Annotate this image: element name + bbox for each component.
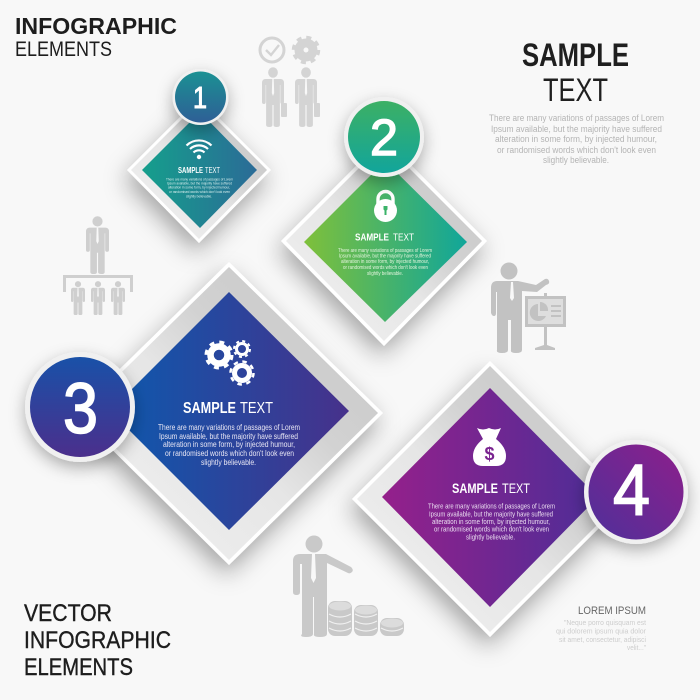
text block: description 2: slightly believable. [367, 271, 403, 277]
text block: intro paragraph [489, 113, 664, 165]
text block: description 3: There are many variations of passages of Lorem [158, 423, 300, 432]
text block: description 4: There are many variations of passages of Lorem [428, 502, 555, 510]
icon: wifi [186, 140, 212, 159]
text block: intro paragraph: There are many variations of passages of Lorem [489, 113, 664, 123]
text block: description 2: alteration in some form, by injected humour, [341, 259, 429, 265]
text block: lorem ipsum quote: "Neque porro quisquam est [564, 618, 647, 627]
heading: sample text [522, 37, 629, 108]
title: vector infographic elements: VECTOR [24, 600, 112, 627]
text block: lorem ipsum quote: sit amet, consectetur, adipisci [559, 635, 646, 644]
badge 1 [172, 69, 228, 125]
text block: intro paragraph: alteration in some form, by injected humour, [495, 134, 657, 144]
heading: sample text 3: SAMPLE [183, 400, 236, 417]
icon: money bag [473, 428, 506, 466]
icon: gears [206, 341, 254, 384]
title: infographic elements: ELEMENTS [15, 38, 112, 61]
heading: sample text 4: SAMPLE [452, 480, 498, 496]
text block: description 2: or randomised words which don't look even [343, 265, 428, 271]
text block: description 1: slightly believable. [186, 194, 212, 198]
text block: description 4: alteration in some form, by injected humour, [432, 517, 550, 526]
heading: sample text 1: SAMPLE [178, 166, 203, 175]
text block: intro paragraph: or randomised words which don't look even [497, 145, 656, 155]
heading: sample text 4: TEXT [502, 480, 530, 496]
text block: description 3: slightly believable. [201, 458, 256, 467]
text block: description 2 [338, 248, 432, 277]
text block: lorem ipsum quote [556, 605, 647, 652]
heading: sample text 2: SAMPLE [355, 232, 389, 244]
panel 2: green diamond [281, 138, 487, 346]
title: infographic elements: INFOGRAPHIC [15, 13, 177, 39]
badge 4: 4 [613, 451, 650, 531]
icon: presenter with board [491, 262, 566, 353]
text block: description 3: Ipsum available, but the majority have suffered [159, 432, 298, 441]
text block: description 3 [158, 423, 300, 467]
heading: sample text: SAMPLE [522, 37, 629, 73]
icon: organisation chart [63, 216, 133, 315]
panel 1: teal diamond [127, 98, 271, 243]
icon: businessmen with clock and gear [260, 38, 320, 127]
title: vector infographic elements [24, 600, 171, 681]
text block: description 1: Ipsum available, but the majority have suffered [167, 180, 232, 186]
badge 2 [344, 97, 424, 177]
icon: businessman with coins [293, 536, 404, 637]
heading: sample text 2: TEXT [393, 232, 414, 244]
icon: money bag: $ [484, 444, 495, 464]
panel 3: blue diamond [75, 262, 383, 565]
badge 2: 2 [370, 109, 398, 166]
text block: intro paragraph: Ipsum available, but the majority have suffered [491, 124, 662, 134]
text block: description 4: Ipsum available, but the majority have suffered [429, 510, 553, 518]
text block: description 3: alteration in some form, by injected humour, [163, 440, 295, 449]
badge 3: 3 [63, 370, 98, 449]
text block: intro paragraph: slightly believable. [543, 155, 609, 165]
panel 4: purple diamond [352, 361, 628, 637]
text block: description 3: or randomised words which don't look even [165, 449, 294, 458]
badge 3 [25, 352, 135, 462]
badge 1: 1 [193, 80, 207, 115]
text block: description 1: There are many variations of passages of Lorem [166, 176, 234, 182]
text block: description 4: slightly believable. [466, 532, 515, 542]
text block: description 2: Ipsum available, but the majority have suffered [339, 254, 431, 260]
heading: sample text 3: TEXT [240, 400, 273, 417]
text block: description 1 [166, 176, 234, 198]
title: vector infographic elements: ELEMENTS [24, 654, 133, 681]
text block: description 1: alteration in some form, by injected humour, [168, 184, 230, 190]
title: vector infographic elements: INFOGRAPHIC [24, 627, 171, 654]
text block: lorem ipsum quote: qui dolorem ipsum quia dolor [556, 626, 646, 636]
heading: sample text: TEXT [543, 72, 608, 108]
text block: lorem ipsum quote: velit..." [627, 643, 646, 652]
title: infographic elements [15, 13, 177, 61]
text block: description 1: or randomised words which don't look even [169, 189, 230, 194]
text block: description 2: There are many variations of passages of Lorem [338, 248, 432, 254]
icon: padlock [374, 192, 397, 222]
heading: sample text 1: TEXT [205, 166, 220, 175]
text block: description 4: or randomised words which don't look even [434, 524, 549, 534]
text block: lorem ipsum quote: LOREM IPSUM [578, 605, 646, 617]
badge 4 [584, 440, 688, 544]
text block: description 4 [428, 502, 555, 542]
